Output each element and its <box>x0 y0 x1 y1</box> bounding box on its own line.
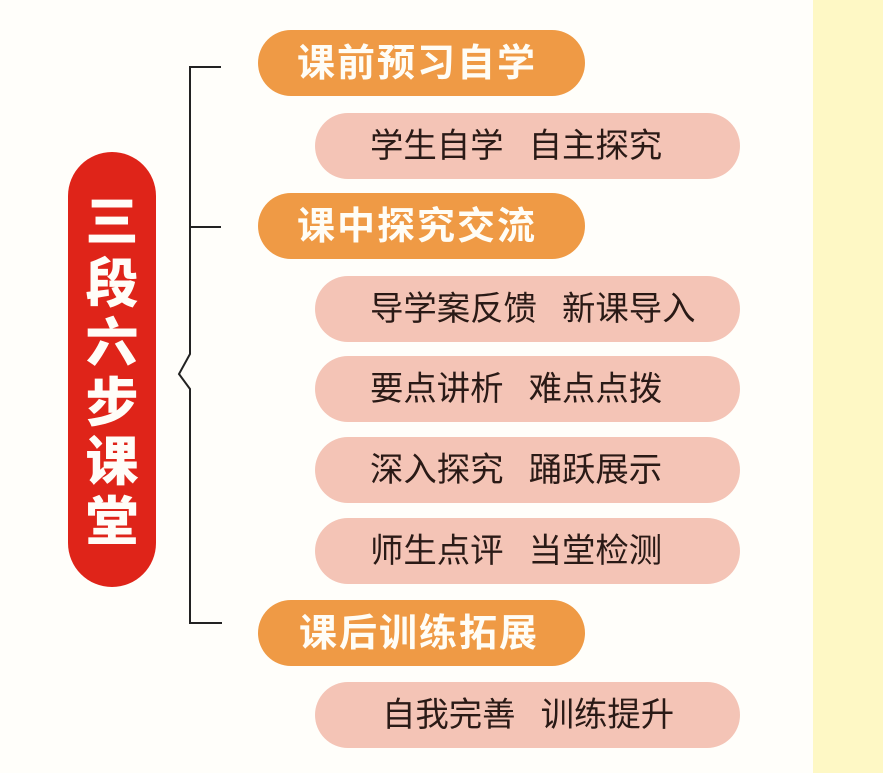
main title pill: 三段六步课堂: 六 <box>86 314 138 373</box>
main title pill: 三段六步课堂: 段 <box>86 255 138 314</box>
main title pill: 三段六步课堂: 三 <box>86 193 138 252</box>
step: 深入探究 踊跃展示 <box>315 437 740 503</box>
stage heading: 课后训练拓展: 课后训练拓展 <box>299 613 539 655</box>
step: 深入探究 踊跃展示: 深入探究 踊跃展示 <box>370 452 662 489</box>
step: 导学案反馈 新课导入: 导学案反馈 新课导入 <box>370 291 696 328</box>
step: 师生点评 当堂检测 <box>315 518 740 584</box>
step: 学生自学 自主探究: 学生自学 自主探究 <box>370 128 662 165</box>
stage heading: 课前预习自学 <box>258 30 585 96</box>
step: 要点讲析 难点点拨: 要点讲析 难点点拨 <box>370 371 662 408</box>
main title pill: 三段六步课堂 <box>68 152 156 587</box>
side panel: pale yellow strip <box>813 0 883 773</box>
stage heading: 课后训练拓展 <box>258 600 585 666</box>
stage heading: 课中探究交流: 课中探究交流 <box>297 206 537 248</box>
step: 导学案反馈 新课导入 <box>315 276 740 342</box>
step: 要点讲析 难点点拨 <box>315 356 740 422</box>
main title pill: 三段六步课堂: 课 <box>86 433 138 492</box>
step: 学生自学 自主探究 <box>315 113 740 179</box>
main title pill: 三段六步课堂: 堂 <box>86 493 138 552</box>
step: 自我完善 训练提升: 自我完善 训练提升 <box>382 697 674 734</box>
step: 自我完善 训练提升 <box>315 682 740 748</box>
stage heading: 课中探究交流 <box>258 193 585 259</box>
main title pill: 三段六步课堂: 步 <box>86 374 138 433</box>
step: 师生点评 当堂检测: 师生点评 当堂检测 <box>370 533 662 570</box>
stage heading: 课前预习自学: 课前预习自学 <box>297 43 537 85</box>
